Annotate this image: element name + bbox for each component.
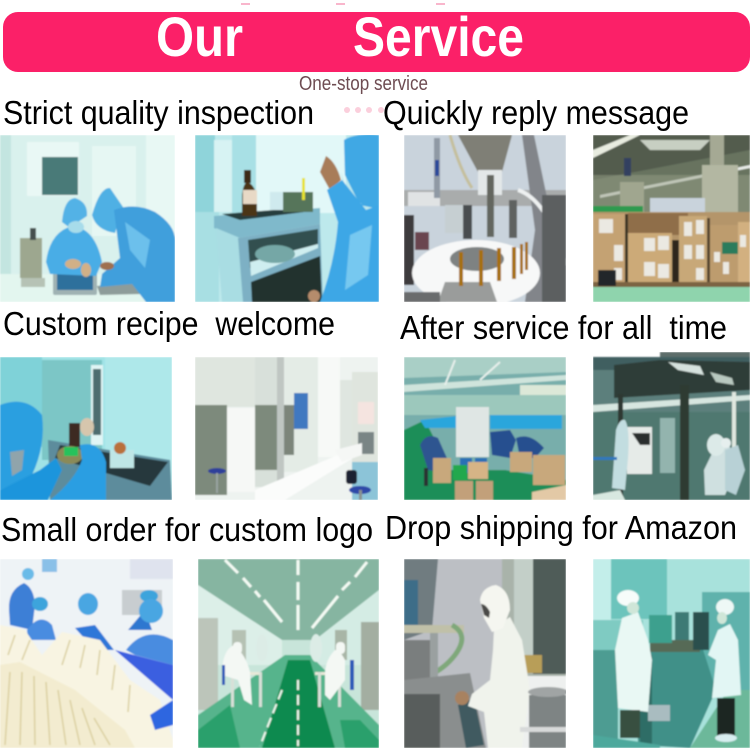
photo: green floor production corridor: [198, 559, 379, 748]
lab stool: [208, 468, 226, 493]
technician right: [708, 599, 741, 742]
operator in white suit: [468, 585, 530, 748]
photo: workers sorting white product batches: [0, 559, 173, 748]
photo: researcher at lab bench with green flask: [0, 357, 172, 500]
technician left: [615, 590, 652, 738]
decorative pink dots: [344, 107, 384, 113]
carton labels: [599, 219, 746, 280]
photo: white clean lab with fume hoods: [195, 357, 378, 500]
photo: vial filling machine: [404, 135, 566, 302]
bottle: [242, 170, 257, 216]
top edge pink marks: [241, 3, 445, 5]
title banner: [3, 5, 750, 72]
heading: quickly reply message: Quickly reply message: [383, 94, 689, 131]
photo: inspection workers in blue suits: [0, 135, 175, 302]
photo: lab bench with bottle and researcher: [195, 135, 379, 302]
title banner: Our: [156, 5, 243, 68]
photo: clean room with workers in white suits: [593, 352, 750, 500]
photo: technicians at teal machinery: [593, 559, 750, 748]
photo: assembly line in factory: [404, 357, 566, 500]
photo: warehouse with pallets of cartons: [593, 135, 750, 302]
title banner: Service: [353, 5, 524, 68]
heading: small order for custom logo: Small order for custom logo: [1, 511, 373, 548]
photo: operator in white suit at mixing tank: [404, 559, 566, 748]
heading: after service for all time: After service for all time: [400, 309, 727, 346]
blue stool: [346, 470, 371, 500]
heading: custom recipe welcome: Custom recipe welcome: [3, 305, 335, 342]
heading: strict quality inspection: Strict quality inspection: [3, 94, 314, 131]
amber vials: [459, 242, 528, 286]
subtitle: One-stop service: [299, 73, 428, 95]
